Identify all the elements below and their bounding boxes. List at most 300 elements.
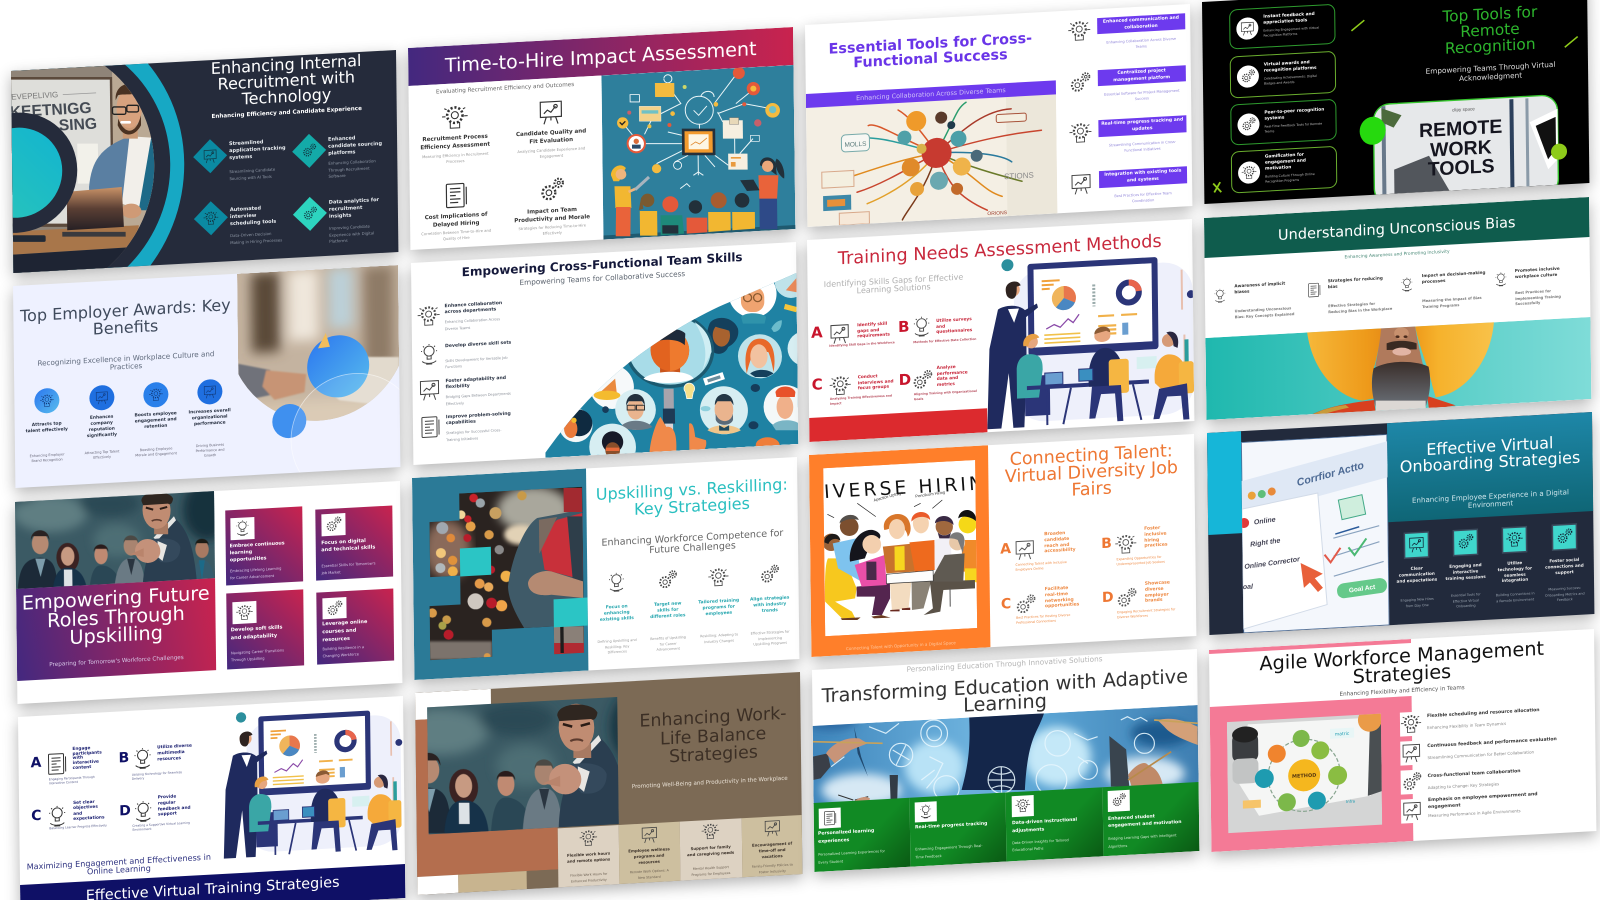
item: interactive training: Engaging and xyxy=(1449,562,1481,569)
item D: Aligning Training with Organizational xyxy=(914,389,977,396)
subtitle: Online Learning xyxy=(87,863,151,876)
item: problem solving: Improve problem-solving xyxy=(446,411,510,420)
item A: A xyxy=(811,323,823,342)
title xyxy=(621,703,805,769)
title: Top Employer Awards: Key xyxy=(20,295,231,326)
item C: and xyxy=(74,811,83,817)
cyan corner block xyxy=(1207,431,1242,535)
card: wellness: resources xyxy=(638,858,660,865)
item: new skills: skills for xyxy=(657,608,678,614)
item: reducing bias: Effective Strategies for xyxy=(1328,302,1375,308)
item: interview scheduling xyxy=(194,201,282,244)
item D: Engaging Recruitment Strategies for xyxy=(1117,607,1175,614)
title xyxy=(988,442,1195,504)
orange side panel xyxy=(809,445,990,657)
colour blocks xyxy=(415,685,558,895)
item D xyxy=(1102,579,1192,620)
item: attracts talent: Attracts top xyxy=(32,421,61,428)
item A: participants xyxy=(73,750,102,756)
panel: Essential Tools for Cross-Functional Success xyxy=(805,4,1192,227)
title block: Preparing for Tomorrow's Workforce Challenges xyxy=(49,655,184,668)
card: instant feedback: Enhancing Engagement with Virtual xyxy=(1263,25,1318,32)
item: efficiency assessment xyxy=(420,106,490,163)
card: continuous learning xyxy=(226,506,303,585)
card: flexible hours: and remote options xyxy=(567,856,610,864)
item: adaptability: Bridging Gaps Between Departments xyxy=(445,391,511,399)
card: gamification: Building Culture Through Online xyxy=(1265,172,1314,178)
item: candidate sourcing: Enhanced xyxy=(328,135,355,142)
item: problem solving xyxy=(421,411,510,442)
card: peer to peer: systems xyxy=(1264,115,1284,121)
item C: Facilitate xyxy=(1045,586,1068,592)
item: interactive training: interactive xyxy=(1452,568,1478,574)
item C xyxy=(31,797,117,834)
item: enhances reputation: Effectively xyxy=(93,455,111,460)
item: cost implications: Correlation Between Time-to-Hire and xyxy=(421,228,491,236)
item: team productivity: Effectively xyxy=(543,230,562,235)
panel: Empowering Future Roles Through Upskilling xyxy=(15,481,403,704)
item: organizational performance: organizational xyxy=(192,414,227,421)
item: communication: Enhanced communication and xyxy=(1103,16,1179,25)
card: gamification xyxy=(1230,145,1337,193)
item: reducing bias: Strategies for reducing xyxy=(1328,275,1383,283)
image: online corrector interface: Goal Act xyxy=(1348,583,1376,594)
item B: questionnaires xyxy=(936,328,972,335)
panel: Connecting Talent xyxy=(809,434,1196,657)
title: Agile Workforce Management xyxy=(1259,637,1544,675)
item: collaboration: Enhance collaboration xyxy=(444,301,502,309)
item: seamless technology: Building Connections in xyxy=(1495,591,1534,597)
card: instant feedback xyxy=(1229,3,1335,49)
item: collaboration: Diverse Teams xyxy=(444,325,470,330)
item: progress tracking xyxy=(1069,115,1187,153)
image: method cycle diagram on desk: matric xyxy=(1335,730,1350,737)
subtitle: Enhancing Workforce Competence for xyxy=(601,528,783,549)
item: clear communication: and expectations xyxy=(1396,576,1437,583)
subtitle: Enhancing Employee Experience in a Digital xyxy=(1411,487,1569,505)
illustration: team with network diagram xyxy=(602,65,796,240)
column: progress tracking xyxy=(910,793,1006,867)
item: implicit biases: biases xyxy=(1234,289,1250,294)
title: Time-to-Hire Impact Assessment xyxy=(445,37,757,77)
item: attracts talent: Enhancing Employer xyxy=(29,452,64,458)
card: online courses xyxy=(316,588,394,664)
item A: Engage xyxy=(73,746,91,752)
illustration: team reviewing dashboards xyxy=(987,257,1194,430)
item: enhances reputation: Attracting Top Talent xyxy=(84,449,119,455)
footer band with title xyxy=(20,864,406,900)
item: new skills xyxy=(642,568,693,661)
item: boosts engagement: Morale and Engagement xyxy=(135,451,177,458)
column: data-driven: adjustments xyxy=(1012,827,1044,834)
item: clear communication: from Day One xyxy=(1405,602,1428,607)
item: attracts talent xyxy=(25,388,68,463)
card: wellness: New Standard xyxy=(638,874,661,879)
item: team productivity: Productivity and Morale xyxy=(514,214,590,224)
panel: Agile Workforce Management Strategies xyxy=(1209,629,1596,852)
column: data-driven: Data-driven instructional xyxy=(1012,818,1077,826)
item: boosts engagement: Boosting Employee xyxy=(139,446,172,452)
card: gamification: Gamification for xyxy=(1264,152,1303,159)
banner: subtitle xyxy=(806,80,1056,108)
illustration: circle of diverse faces xyxy=(545,273,798,458)
title block: Upskilling xyxy=(70,621,163,649)
item D: Diverse Workforces xyxy=(1117,613,1148,619)
subtitle: Enhancing Flexibility and Efficiency in Teams xyxy=(1339,685,1465,698)
column: student engagement: engagement and motivation xyxy=(1108,819,1182,828)
card: continuous learning: learning xyxy=(230,550,253,556)
title: Recognition xyxy=(1444,35,1535,57)
item: team productivity xyxy=(514,178,590,235)
item: inclusive culture xyxy=(1493,261,1583,312)
mind-map image: MOLLS xyxy=(844,141,867,149)
item: attracts talent: talent effectively xyxy=(25,427,68,434)
item: efficiency assessment: Measuring Efficiency in Recruitment xyxy=(422,151,489,159)
title: Virtual Diversity Job xyxy=(1005,458,1178,487)
photo: man at laptop in circular crop with teal rings: EVEPELIVIG xyxy=(11,90,58,101)
item: streamlined ATS: Sourcing with AI Tools xyxy=(229,173,271,180)
panel: Time-to-Hire Impact Assessment xyxy=(408,27,795,250)
item: diverse skills: Functions xyxy=(445,364,462,369)
item: streamlined ATS xyxy=(193,139,286,180)
subtitle: Promoting Well-Being and Productivity in the Workplace xyxy=(632,775,788,790)
item A: Identify skill xyxy=(857,322,887,328)
title: Connecting Talent: xyxy=(1010,441,1173,470)
panel: Effective Virtual Training Strategies xyxy=(18,696,406,900)
column: personalized learning xyxy=(814,798,910,872)
column: data-driven: Data-Driven Insights for Tailored xyxy=(1012,838,1069,845)
item: seamless technology: a Remote Environment xyxy=(1496,596,1534,603)
item: efficiency assessment: Recruitment Process xyxy=(422,133,488,143)
image: remote work tools: clipy space xyxy=(1452,106,1475,112)
column: personalized learning: experiences xyxy=(818,838,849,844)
column: student engagement: Bridging Learning Gaps with Intelligent xyxy=(1108,833,1177,841)
card: peer to peer: Teams xyxy=(1264,129,1274,134)
item: inclusive culture: Promotes inclusive xyxy=(1515,266,1560,273)
item: attracts talent: Brand Recognition xyxy=(31,458,63,463)
item A: Broaden xyxy=(1044,531,1065,537)
item: candidate quality: Engagement xyxy=(540,153,563,158)
item: communication xyxy=(1068,13,1186,49)
card: virtual awards: recognition platforms xyxy=(1263,65,1316,73)
item: organizational performance: Driving Business xyxy=(196,443,224,448)
item A: content xyxy=(73,765,92,771)
card: family support: Programs for Employees xyxy=(691,870,730,876)
item: candidate sourcing: platforms xyxy=(328,149,355,156)
card: online courses: resources xyxy=(323,636,350,643)
item: implicit biases: Awareness of implicit xyxy=(1234,281,1285,288)
item: new skills: different roles xyxy=(650,613,686,620)
item: continuous feedback: Streamlining Communication for Better Collaboration xyxy=(1427,749,1534,760)
item C: Impact xyxy=(830,401,842,406)
title: Technology xyxy=(241,85,331,109)
subtitle xyxy=(1387,487,1593,514)
item: seamless technology: technology for xyxy=(1497,565,1532,572)
item A: A xyxy=(1000,541,1011,558)
item: enhances reputation: company xyxy=(90,421,113,427)
item: candidate sourcing: Enhancing Collaboration xyxy=(328,158,376,165)
card: time off xyxy=(742,815,802,878)
subtitle: Practices xyxy=(110,361,142,372)
title: Enhancing Internal xyxy=(210,51,361,78)
image: online corrector interface: Online Corrector xyxy=(1244,556,1301,571)
item: data analytics: Data analytics for xyxy=(328,197,379,205)
photo: man pointing with team xyxy=(427,697,619,834)
item: continuous feedback: Continuous feedback and performance evaluation xyxy=(1427,737,1557,749)
card: time off: Foster Inclusivity xyxy=(759,868,786,874)
card: family support xyxy=(679,818,742,881)
title: Learning xyxy=(963,689,1047,717)
accent marks xyxy=(1212,20,1578,193)
item: collaboration xyxy=(418,301,502,330)
card: digital skills: Job Market xyxy=(322,570,341,575)
item: align strategies: trends xyxy=(762,608,778,614)
item: new skills: Target new xyxy=(654,602,681,608)
item: existing skills xyxy=(591,571,642,664)
item C: objectives xyxy=(73,805,98,811)
item D: data and xyxy=(937,376,958,382)
subtitle: Acknowledgment xyxy=(1459,70,1522,82)
item: project platform: Success xyxy=(1135,96,1149,101)
item B: practices xyxy=(1144,543,1168,549)
title: Benefits xyxy=(92,316,158,338)
item: cross-functional xyxy=(1401,760,1591,795)
item D: performance xyxy=(937,370,968,377)
panel: Empowering Cross-Functional Team Skills xyxy=(411,242,798,465)
item C: networking xyxy=(1045,597,1074,604)
item C: interviews and xyxy=(858,379,894,386)
item: integration: and systems xyxy=(1127,177,1159,184)
panel: Enhancing Work-Life Balance Strategies xyxy=(415,672,802,895)
item: inclusive culture: Best Practices for xyxy=(1515,289,1551,295)
item: social connections: support xyxy=(1555,568,1573,574)
item D: support xyxy=(158,811,177,818)
column: data-driven xyxy=(1006,787,1103,862)
item: inclusive culture: Successfully xyxy=(1515,301,1540,306)
item: data analytics: Improving Candidate xyxy=(329,223,370,230)
item D: metrics xyxy=(937,382,955,388)
item D: brands xyxy=(1145,598,1163,604)
card: online courses: Changing Workforce xyxy=(323,652,359,658)
item: candidate sourcing: Software xyxy=(328,173,345,178)
illustration: diverse hiring group: Pencilcom Hiring xyxy=(915,490,945,499)
item C: Professional Connections xyxy=(1016,618,1056,624)
title: Functional Success xyxy=(853,47,1008,71)
item: enhances reputation: significantly xyxy=(86,432,117,439)
item: efficiency assessment: Processes xyxy=(446,158,465,163)
photo: man at laptop in circular crop with teal rings: SING xyxy=(58,115,97,134)
item D: employer xyxy=(1145,592,1169,598)
title: Recruitment with xyxy=(217,67,355,94)
item: new skills: for Career xyxy=(660,641,677,646)
footer caption: Connecting Talent with Opportunity in a Digital Space xyxy=(846,640,956,651)
item D: Creating a Supportive Virtual Learning xyxy=(133,820,190,828)
subtitle: Empowering Teams for Collaborative Success xyxy=(519,269,685,287)
item A xyxy=(31,745,116,788)
item D xyxy=(119,793,205,833)
column: progress tracking: Real-time progress tracking xyxy=(915,822,987,830)
left colour field xyxy=(412,469,588,680)
item: align strategies: Implementing xyxy=(758,636,782,641)
subtitle: Personalizing Education Through Innovative Solutions xyxy=(907,654,1103,674)
item: interactive training: Essential Tools for xyxy=(1451,592,1480,598)
item: implicit biases xyxy=(1214,281,1294,319)
item: existing skills: Differences xyxy=(608,650,627,655)
item B: B xyxy=(1101,536,1112,552)
item B: Underrepresented Job Seekers xyxy=(1116,559,1165,566)
item: project platform: Centralized project xyxy=(1117,68,1166,76)
item: cross-functional: Cross-functional team collaboration xyxy=(1428,769,1521,779)
item: existing skills: Reskilling: Key xyxy=(605,644,629,649)
item: flexible scheduling xyxy=(1400,702,1590,737)
title: Onboarding Strategies xyxy=(1399,447,1580,476)
column: personalized learning: Personalized Learning Experiences for xyxy=(818,849,885,857)
card: continuous learning: for Career Advancement xyxy=(230,574,274,580)
card: family support: Mental Health Support xyxy=(693,865,729,871)
item: social connections: Foster social xyxy=(1549,556,1579,563)
subtitle: Empowering Teams Through Virtual xyxy=(1425,59,1555,76)
item: communication: Enhancing Collaboration Across Diverse xyxy=(1106,37,1176,45)
subtitle: Enhancing Awareness and Promoting Inclusivity xyxy=(1345,250,1450,260)
card: continuous learning: opportunities xyxy=(230,556,267,563)
item: integration xyxy=(1072,166,1188,203)
item D: D xyxy=(119,803,131,819)
item B: inclusive xyxy=(1144,531,1167,538)
item A: A xyxy=(31,754,42,771)
item: implicit biases: Understanding Unconscious xyxy=(1235,306,1291,313)
card: continuous learning: Embrace continuous xyxy=(230,541,285,549)
photo: man pointing with team xyxy=(15,491,215,589)
item D: Provide xyxy=(158,794,177,800)
illustration: diverse hiring group: Apactice Upfrage xyxy=(873,490,904,503)
item A: accessibility xyxy=(1044,548,1076,555)
item C: C xyxy=(1001,596,1011,613)
card: flexible hours xyxy=(558,825,619,888)
item A: candidate xyxy=(1044,537,1069,543)
subtitle: Maximizing Engagement and Effectiveness in xyxy=(27,851,211,871)
card: flexible hours: Flexible work hours xyxy=(567,850,610,858)
item: adaptability: Foster adaptability and xyxy=(445,376,506,384)
item B: Utilizing Technology for Seamless xyxy=(132,770,182,777)
item: tailored training: Industry Changes xyxy=(704,638,734,644)
item A: Engaging Participants Through xyxy=(49,775,95,781)
photo: man at laptop in circular crop with teal rings xyxy=(11,64,184,273)
item: diverse skills xyxy=(421,340,511,369)
item D: diverse xyxy=(1145,587,1164,593)
item A: interactive xyxy=(73,759,99,766)
item: data analytics: recruitment xyxy=(329,205,362,212)
item: streamlined ATS: application tracking xyxy=(229,145,285,154)
card: peer to peer: Real-Time Feedback Tools for Remote xyxy=(1264,121,1322,128)
title xyxy=(586,475,798,521)
item: enhances reputation xyxy=(84,385,120,460)
title xyxy=(1387,433,1592,475)
image: online corrector interface xyxy=(1241,434,1389,633)
card: wellness xyxy=(619,821,680,885)
item: communication: Teams xyxy=(1136,44,1147,49)
item: cost implications: Cost Implications of xyxy=(425,211,487,221)
item D: regular xyxy=(158,800,176,806)
item: existing skills: Defining Upskilling and xyxy=(597,638,637,644)
item: clear communication: communication xyxy=(1398,570,1434,577)
item: enhances reputation: reputation xyxy=(88,427,115,433)
item A: Interactive Content xyxy=(49,780,78,785)
card: soft skills xyxy=(227,589,304,669)
item B: Foster xyxy=(1144,526,1160,532)
card: peer to peer: Peer-to-peer recognition xyxy=(1264,107,1324,115)
item: project platform: management platform xyxy=(1113,75,1170,83)
image: method cycle diagram on desk xyxy=(1227,713,1382,833)
item A: gaps and xyxy=(857,328,879,334)
pink blocks xyxy=(1209,639,1413,852)
card: wellness: Employee wellness xyxy=(628,846,670,853)
card: online courses: Building Resilience in a xyxy=(323,645,364,651)
title block: Roles Through xyxy=(47,601,185,632)
column: student engagement xyxy=(1103,782,1199,856)
item C: focus groups xyxy=(858,385,889,392)
title: Understanding Unconscious Bias xyxy=(1278,215,1516,244)
item: continuous feedback xyxy=(1400,731,1591,766)
panel: Training Needs Assessment Methods xyxy=(807,219,1194,442)
item: adaptability: Effectively xyxy=(445,400,464,405)
item: social connections: Onboarding Metrics and xyxy=(1545,591,1584,597)
item: seamless technology: Utilize xyxy=(1507,560,1522,565)
panel: Top Employer Awards xyxy=(13,265,400,488)
item: integration: Best Practices for Effective Team xyxy=(1114,191,1172,198)
item: align strategies: Upskilling Programs xyxy=(753,641,787,647)
image: remote work tools: REMOTE xyxy=(1418,115,1502,142)
title xyxy=(812,667,1198,722)
item: problem solving: capabilities xyxy=(446,419,476,426)
card: time off: Family-Friendly Policies to xyxy=(752,862,793,868)
item: diverse skills: Skills Development for Versatile Job xyxy=(445,355,507,362)
item B xyxy=(119,741,204,783)
card: gamification: engagement and xyxy=(1264,158,1305,165)
item B: and xyxy=(936,324,945,330)
item: streamlined ATS: systems xyxy=(229,154,252,161)
item: align strategies: Align strategies xyxy=(750,596,789,603)
item: progress tracking: updates xyxy=(1132,126,1153,132)
card: instant feedback: Instant feedback and xyxy=(1263,12,1314,19)
title: Life Balance xyxy=(660,723,766,749)
item: reducing bias: bias xyxy=(1328,284,1338,289)
item: candidate quality xyxy=(516,100,586,158)
item: boosts engagement: engagement and xyxy=(135,417,176,424)
item: candidate sourcing: Through Recruitment xyxy=(328,165,369,172)
item: seamless technology: seamless xyxy=(1504,571,1525,577)
item D: Analyze xyxy=(937,365,956,371)
column: progress tracking: Time Feedback xyxy=(915,854,942,859)
mind-map image xyxy=(806,94,1058,227)
item: flexible scheduling: Enhancing Flexibility in Team Dynamics xyxy=(1427,721,1506,730)
column: student engagement: Enhanced student xyxy=(1108,814,1155,822)
title: Training Needs Assessment Methods xyxy=(838,232,1162,269)
item C: Balancing Learner Progress Effectively xyxy=(50,823,107,830)
item B xyxy=(898,316,976,344)
illustration: team reviewing dashboards xyxy=(208,696,405,874)
item: data analytics xyxy=(293,196,379,243)
column: personalized learning: Personalized learning xyxy=(818,829,874,837)
item: streamlined ATS: Streamlined xyxy=(229,139,263,147)
card: time off: time-off and xyxy=(759,847,786,853)
item: align strategies: Effective Strategies for xyxy=(751,630,790,636)
item: interview scheduling: interview xyxy=(230,212,256,220)
item: candidate quality: Candidate Quality and xyxy=(516,128,586,138)
title xyxy=(210,51,361,109)
item: social connections: Measuring Success: xyxy=(1548,585,1581,591)
card: digital skills xyxy=(315,505,393,580)
item: organizational performance: performance xyxy=(194,421,225,427)
